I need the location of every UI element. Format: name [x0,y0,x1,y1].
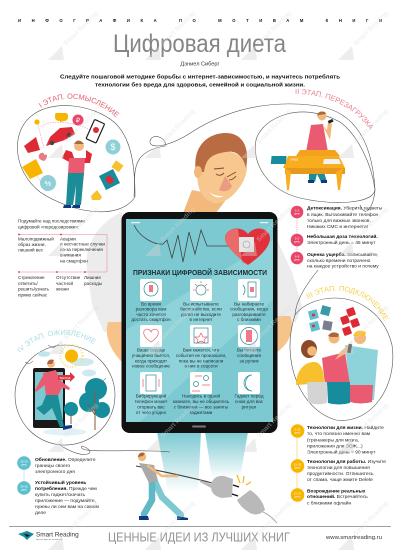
sign 4: новое сообщение [132,364,170,368]
text block: consequences: жизни [56,286,69,292]
ECG line and heart [134,225,270,265]
text block: consequences: Малоподвижный [18,236,54,242]
sign 3: разговариваете [232,312,266,317]
stage III text: продуктивности. Отпишитесь [307,471,374,477]
sign 5: Вам кажется, что [183,348,220,352]
text block: consequences: Отсутствие [56,275,81,280]
text block: consequences: прямо сейчас [18,292,48,298]
text block: stage II steps: Детоксикация. Уберите гаджеты [307,206,383,212]
stage IV text: приложение — подумайте, [35,497,96,504]
title: Цифровая диета [113,30,286,58]
text: Smart Reading [352,10,390,47]
sign 5: события не произошли, [176,353,226,358]
badge: days 26-27 [291,488,304,502]
sign 3: Вы набираете [234,302,264,306]
badge: days 28 [17,456,31,470]
sign 7: от чего угодно [136,410,167,415]
footer slogan: ЦЕННЫЕ ИДЕИ ИЗ ЛУЧШИХ КНИГ [108,530,290,544]
text block: consequences: на смартфон [60,258,88,264]
sign 1: Во время [141,302,162,306]
sign 8: с близкими — все заняты [174,404,228,410]
illustration: three friends with social icons [296,305,378,404]
sign 1: достать смартфон [131,317,171,322]
sign 3 [230,279,268,322]
stage III text: Электронный день = 90 минут [307,448,376,456]
sign 6: Вы читаете [237,348,262,352]
sign 2: долго не выходите [181,312,221,317]
text block: consequences: внимания [60,252,81,258]
text block: consequences: образ жизни, [18,242,46,247]
badge: days 26-27: день [295,496,301,498]
sign 4 [132,325,170,368]
sign 6: за рулем [239,358,259,364]
sign 8 [173,372,230,415]
sign 7: телефон может [134,399,168,404]
heading: stage I: I ЭТАП. ОСМЫСЛЕНИЕ [38,94,120,118]
badge: days 1-2 [291,206,303,218]
badge: days 28: 28–29 [20,460,28,464]
illustration: worried man and temptations [22,113,123,208]
text block: consequences: Подумайте над последствиями [18,218,85,224]
sign 5: пока вы не написали [179,358,224,364]
stage III text: (тренажеры для мозга, [307,438,359,444]
badge: days 6-8: день [294,258,301,262]
stage III text: то, что полезно именно вам [307,432,371,437]
author: Дэниел Сиберг [180,62,220,68]
badge: days 6-8 [291,252,303,264]
text block: stage II steps: только для важных звонков. [307,219,371,224]
badge: day 30: 29–30 [20,484,28,488]
tablet [122,212,278,433]
text: Smart Reading [159,108,197,145]
stage I circle [17,94,136,212]
sign 2: в интернет [189,317,213,322]
text: Smart Reading [62,10,100,47]
stage IV text: Устойчивый уровень [35,479,86,486]
badge: days 9-21 [291,424,304,438]
stage III text: отношений. Встречайтесь [307,493,368,500]
stage IV text: деле [35,511,46,516]
text block: stage II steps: Оценка ущерба. Записывайте, [307,251,378,258]
text block: consequences [18,218,107,298]
stage IV text: границы своего [35,464,70,469]
sign 3: с близкими [237,317,261,322]
badge: days 3-5: 3–5 [295,236,300,240]
sign 2: беспокойство, если [180,306,222,312]
heading: signs of digital addiction: ПРИЗНАКИ ЦИФРОВОЙ ЗАВИСИМОСТИ [133,268,267,277]
stage II circle [255,88,376,203]
badge: days 28: день [21,464,28,466]
text block: stage II steps: на каждое устройство и почему [307,262,379,270]
sign 9: Гаджет перед [234,394,264,398]
logo: Smart Reading [36,532,79,538]
text: Smart Reading [62,304,100,341]
badge: days 6-8: 6–8 [295,254,300,258]
sign 1 [131,279,171,322]
text: Smart Reading [352,108,390,145]
sign 9: сном для вас [235,399,264,404]
text block: stage II steps: Никаких СМС и интернета! [307,224,368,230]
badge: days 9-21: 9–21 [295,428,301,432]
badge: days 3-5: день [294,240,301,244]
sign 4: когда приходит [135,358,168,364]
text block: stage II steps: Небольшая доза технологий. [307,233,378,240]
sign 1: часто хочется [136,312,166,317]
logo [18,531,79,541]
stage IV text: потребления. Прежде чем [35,485,97,492]
text: Smart Reading [62,108,100,145]
stage III text: от спама, чаще жмите Delete [307,477,373,483]
website: www.smartreading.ru [325,535,382,541]
stage III circle [290,286,394,421]
sign 7 [134,372,168,415]
badge: days 1-2: день [294,212,301,216]
stage IV text: Обновление. Определите [35,456,96,463]
text block: consequences: ответить/ [18,281,39,286]
text block: consequences: Стремление [18,275,45,280]
illustration: worried man and temptations: % [45,179,52,188]
text: Smart Reading [159,10,197,47]
sign 8: комнате, вы не общаетесь [173,399,230,404]
badge: days 9-21: день [295,432,301,434]
text block: consequences: решить/узнать [18,286,50,292]
text block: stage II steps [291,206,383,270]
stage III text: с близкими офлайн [307,500,351,506]
illustration: worried man and temptations: $ [110,142,116,152]
text: Smart Reading [255,206,293,243]
text: Smart Reading [255,10,293,47]
badge: days 22-25 [291,459,304,473]
intro text: Следуйте пошаговой методике борьбы с интернет-зависимостью, и научитесь потреблять [60,74,341,80]
text: Smart Reading [255,108,293,145]
head [183,133,247,213]
stage III text: Возрождение реальных [307,488,366,494]
text: Smart Reading [62,206,100,243]
text: Smart Reading [352,402,390,439]
connecting line [60,104,375,454]
footer rule [9,525,391,528]
sign 5 [176,325,226,368]
badge: day 30: день [21,488,28,492]
heading: stage II: II ЭТАП. ПЕРЕЗАГРУЗКА [296,88,373,130]
badge: day 30 [17,481,31,495]
sign 5: о них в соцсети [184,364,218,368]
sign 7: Вибрирующий [136,392,167,398]
text block: consequences: лишний вес [18,246,44,252]
text: Smart Reading [62,500,100,537]
badge: days 1-2: 1–2 [295,208,300,212]
sign 9 [234,372,264,410]
text block: consequences: частной [56,280,73,286]
text: Smart Reading [159,206,197,243]
sign 8: Находясь в одной [182,392,221,398]
intro text: технологии без вреда для здоровья, семейной и социальной жизни. [95,82,305,88]
text: Smart Reading [255,500,293,537]
text: Smart Reading [352,500,390,537]
text block: consequences: расходы [84,281,102,286]
stage III text: Технологии для жизни. Найдите [307,424,384,431]
sign 6 [237,325,262,364]
man body behind tablet [86,212,302,492]
sign 2: Вы испытываете [183,302,219,306]
sign 8: гаджетами [190,410,213,415]
intro text [60,74,341,88]
heading: stage IV: IV ЭТАП. ОЖИВЛЕНИЕ [16,330,96,352]
stage III text: технологии для повышения [307,466,370,471]
text block: consequences: цифровой «передозировки»: [18,224,79,230]
sign 2 [180,279,222,322]
sign 1: разговора вам [136,306,166,312]
sign 6: сообщения [237,353,261,358]
text: Smart Reading [255,304,293,341]
text: Smart Reading [255,402,293,439]
stage IV text: электронного дня [35,470,75,475]
sign 9: ритуал [242,404,257,410]
sign 4: учащённо бьётся, [132,353,170,358]
badge: days 22-25: 22–25 [294,462,302,466]
stage III text [291,424,386,506]
stage IV text: нужны ли они вам на самом [35,505,100,510]
text: Smart Reading [352,304,390,341]
stage III text: приложения для ЗОЖ...) [307,444,363,450]
text: Smart Reading [352,206,390,243]
text block: consequences: Аварии [60,236,76,242]
stage III text: Технологии для работы. Изучите [307,458,386,465]
text block: stage II steps: сколько времени потрачено [307,259,371,264]
text block: consequences: и несчастные случаи [60,242,105,246]
stage IV text [17,456,100,516]
sign 4: Ваше сердце [137,348,166,352]
plugs [200,475,277,523]
illustration: man leaves phone: ВЫХОД [60,376,70,380]
text: Smart Reading [159,402,197,439]
text block: consequences: из-за переключения [60,247,103,252]
text block: stage II steps: в ящик. Вытаскивайте телефон [307,211,379,218]
heading: stage III: III ЭТАП. ПОДКЛЮЧЕНИЕ [306,286,389,321]
badge: days 26-27: 26–27 [294,492,302,496]
text block: stage II steps: Электронный день = 45 минут [307,239,376,246]
sign 3: сообщения, когда [230,306,268,312]
badge: days 3-5 [291,234,303,246]
sign 7: оторвать вас [137,404,165,410]
text: Smart Reading [159,500,197,537]
stage IV text: купить гаджет/скачать [35,492,86,498]
text: Smart Reading [62,402,100,439]
header label: ИНФОГРАФИКА ПО МОТИВАМ КНИГИ [18,18,382,23]
man pulling the cord [136,452,212,520]
stage IV circle [14,330,116,446]
text: Smart Reading [159,304,197,341]
text block: consequences: Лишние [84,275,101,280]
illustration: man at desk: 14:53 [290,158,298,162]
illustration: worried man and temptations: ₽ [76,116,81,124]
logo: Ценные идеи из лучших книг [36,539,63,541]
badge: days 22-25: день [295,466,301,470]
